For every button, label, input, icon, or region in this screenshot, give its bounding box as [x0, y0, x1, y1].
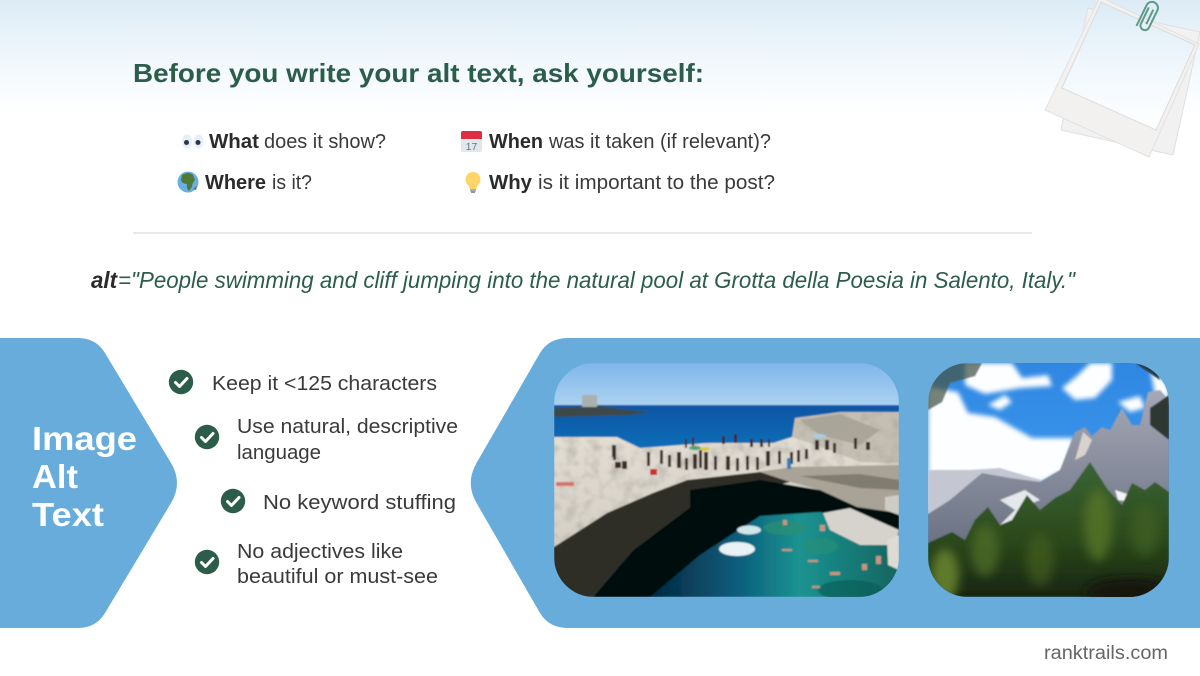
question: when: When	[489, 131, 543, 153]
question: why: Why	[489, 172, 533, 194]
photo: Grotta della Poesia	[554, 363, 899, 600]
item: no adjectives	[195, 541, 438, 588]
item: no adjectives: No adjectives like	[237, 541, 403, 563]
item: no adjectives: beautiful or must-see	[237, 566, 438, 588]
item: natural language: language	[237, 442, 321, 464]
item: natural language	[195, 416, 458, 464]
panel: photo backdrop	[471, 338, 1200, 628]
questions	[178, 131, 775, 194]
question: when: 17	[466, 141, 477, 153]
photo: Dolomites peaks	[928, 363, 1175, 606]
icon: polaroid photos with paperclip	[1045, 0, 1200, 157]
question: where	[178, 172, 312, 194]
item: no keyword stuffing: No keyword stuffing	[263, 492, 456, 514]
alt text example: ="People swimming and cliff jumping into the natural pool at Grotta della Poesia in Salento, Italy."	[118, 267, 1077, 293]
question: what	[182, 131, 386, 153]
question: what: does it show?	[264, 131, 386, 153]
heading: image alt text: Text	[32, 496, 104, 533]
item: keep it short: Keep it <125 characters	[212, 373, 437, 395]
alt text example: alt	[91, 267, 118, 293]
item: keep it short	[169, 370, 437, 395]
question: when: was it taken (if relevant)?	[548, 131, 771, 153]
item: natural language: Use natural, descriptive	[237, 416, 458, 438]
panel: image alt text tag	[0, 338, 177, 628]
question: why: is it important to the post?	[538, 172, 775, 194]
checklist	[169, 370, 458, 588]
title: Before you write your alt text, ask yourself:	[133, 58, 704, 88]
question: where: is it?	[272, 172, 312, 194]
source credit: ranktrails.com	[1044, 643, 1168, 664]
item: no keyword stuffing	[221, 489, 456, 514]
question: what: What	[209, 131, 259, 153]
heading: image alt text	[32, 420, 137, 533]
question: where: Where	[205, 172, 266, 194]
heading: image alt text: Alt	[32, 458, 78, 495]
heading: image alt text: Image	[32, 420, 137, 457]
